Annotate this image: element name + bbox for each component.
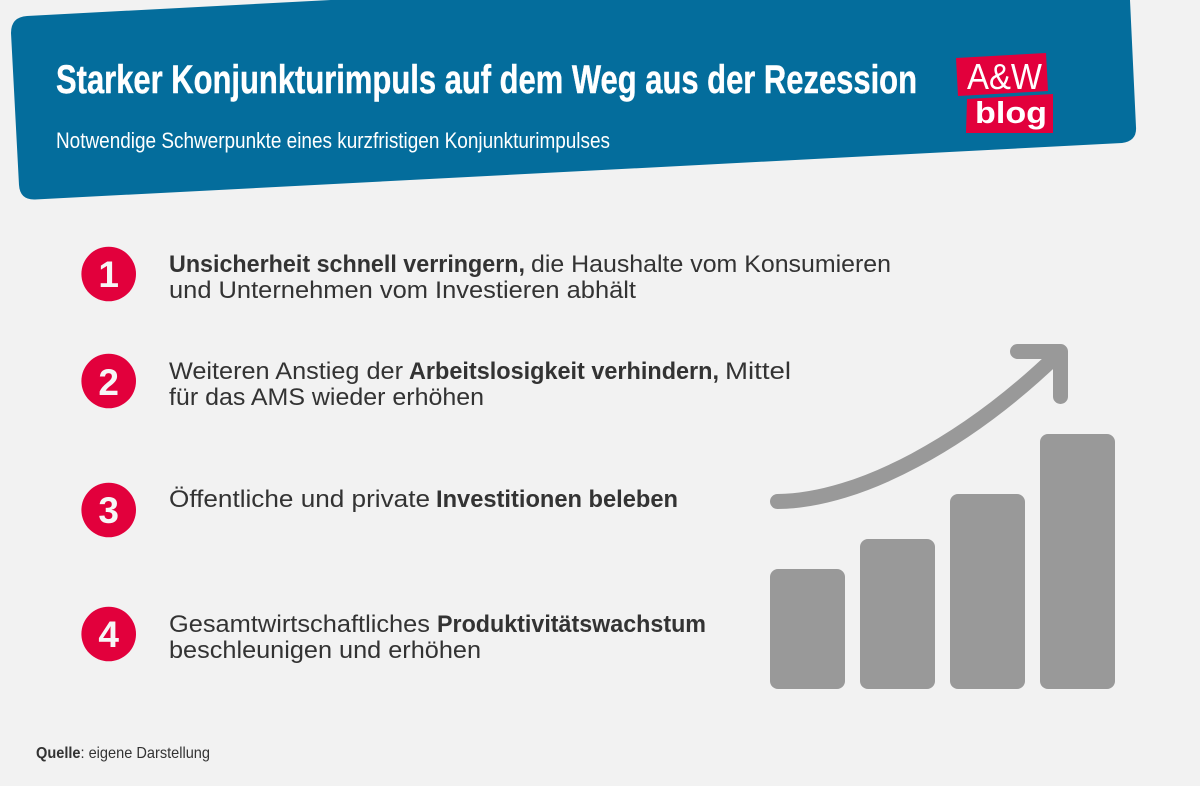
item 4 text: Gesamtwirtschaftliches — [169, 611, 430, 638]
item 1 text: und Unternehmen vom Investieren abhält — [169, 277, 636, 304]
number badge 3 — [81, 483, 136, 537]
subtitle: Notwendige Schwerpunkte eines kurzfristigen Konjunkturimpulses — [56, 128, 610, 153]
item 3 text: Öffentliche und private — [169, 486, 430, 513]
item 2 text: Mittel — [725, 358, 791, 385]
icon: rising bar chart with arrow — [770, 352, 1115, 689]
number badge 4: 4 — [98, 614, 119, 655]
arrow — [778, 352, 1060, 502]
number badge 3: 3 — [98, 490, 119, 531]
logo: A&W blog: blog — [975, 95, 1047, 130]
header panel — [11, 0, 1136, 200]
number badge 1 — [81, 247, 136, 301]
number badge 4 — [81, 607, 136, 661]
number badge 2 — [81, 354, 136, 408]
item 3 text — [169, 486, 678, 513]
item 1 text: die Haushalte vom Konsumieren — [531, 251, 891, 278]
item 1 — [81, 247, 891, 304]
item 2 — [81, 354, 791, 411]
item 4 text — [169, 611, 706, 664]
item 3 — [81, 483, 678, 537]
logo: A&W blog: A&W — [967, 56, 1042, 97]
item 1 text: Unsicherheit schnell verringern, — [169, 251, 525, 278]
item 4 — [81, 607, 706, 664]
bars — [770, 434, 1115, 689]
item 3 text: Investitionen beleben — [436, 486, 678, 513]
logo: A&W blog — [956, 53, 1053, 133]
title: Starker Konjunkturimpuls auf dem Weg aus der Rezession — [56, 58, 917, 102]
item 2 text: Weiteren Anstieg der — [169, 358, 403, 385]
item 4 text: Produktivitätswachstum — [437, 611, 706, 638]
header background — [11, 0, 1136, 200]
item 2 text: für das AMS wieder erhöhen — [169, 384, 484, 411]
source note: Quelle: eigene Darstellung — [36, 745, 210, 762]
item 2 text: Arbeitslosigkeit verhindern, — [409, 358, 719, 385]
number badge 1: 1 — [98, 254, 119, 295]
item 4 text: beschleunigen und erhöhen — [169, 637, 481, 664]
number badge 2: 2 — [98, 362, 119, 403]
item 1 text — [169, 251, 891, 304]
item 2 text — [169, 358, 791, 411]
